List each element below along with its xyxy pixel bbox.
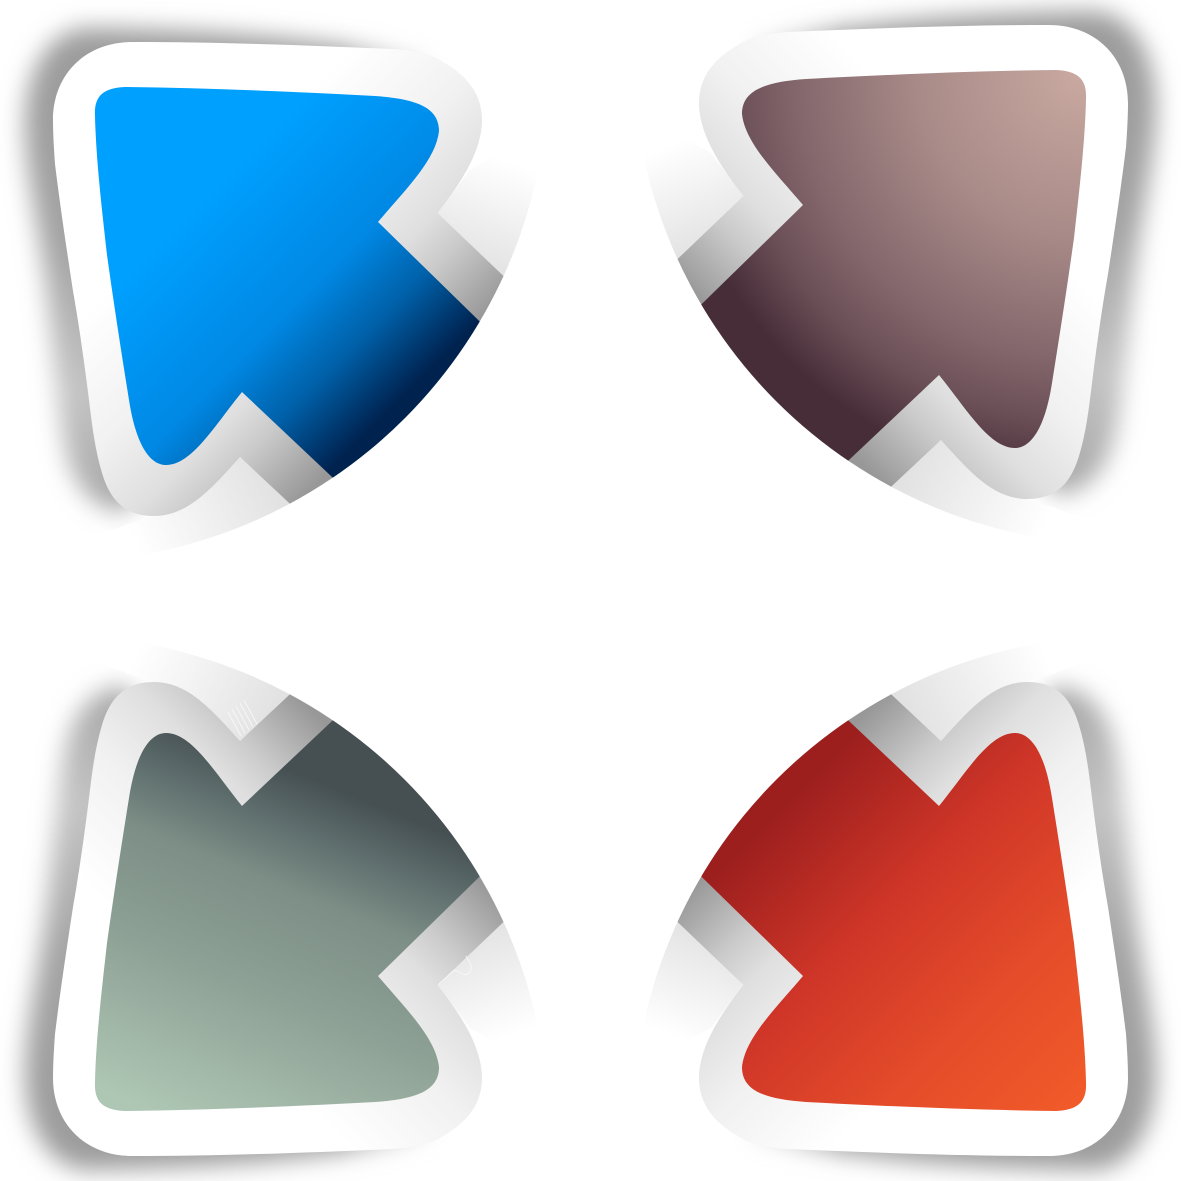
panel: top-right brown arrow <box>621 11 1156 553</box>
fold wedge upper <box>652 163 743 259</box>
fold wedge lower <box>891 653 1014 740</box>
panel: bottom-left green arrow <box>25 628 560 1170</box>
fold wedge lower <box>891 440 1012 528</box>
white arrow border <box>678 682 1128 1156</box>
fold wedge upper <box>438 922 530 1018</box>
white arrow border <box>52 42 504 516</box>
curved sheet clipped by arc <box>652 653 1128 1156</box>
orange arrow <box>701 720 1086 1111</box>
fold wedge upper <box>652 922 743 1018</box>
blue arrow <box>94 87 480 478</box>
green arrow <box>94 720 480 1111</box>
fold wedge lower <box>169 653 290 741</box>
drop shadow <box>738 686 1156 1170</box>
fold wedge lower <box>169 458 290 546</box>
drop shadow <box>738 11 1156 495</box>
brown arrow <box>701 70 1086 461</box>
drop shadow <box>25 686 443 1170</box>
curved sheet clipped by arc <box>652 25 1128 528</box>
curved sheet clipped by arc <box>52 42 530 546</box>
faint hatch artifact on bottom-left border <box>228 700 471 984</box>
drop shadow <box>25 28 443 512</box>
curved sheet clipped by arc <box>53 653 530 1156</box>
panel: top-left blue arrow <box>25 28 560 570</box>
white arrow border <box>53 682 504 1156</box>
fold wedge upper <box>438 180 530 276</box>
panel: bottom-right orange arrow <box>621 628 1156 1170</box>
white arrow border <box>678 25 1128 499</box>
